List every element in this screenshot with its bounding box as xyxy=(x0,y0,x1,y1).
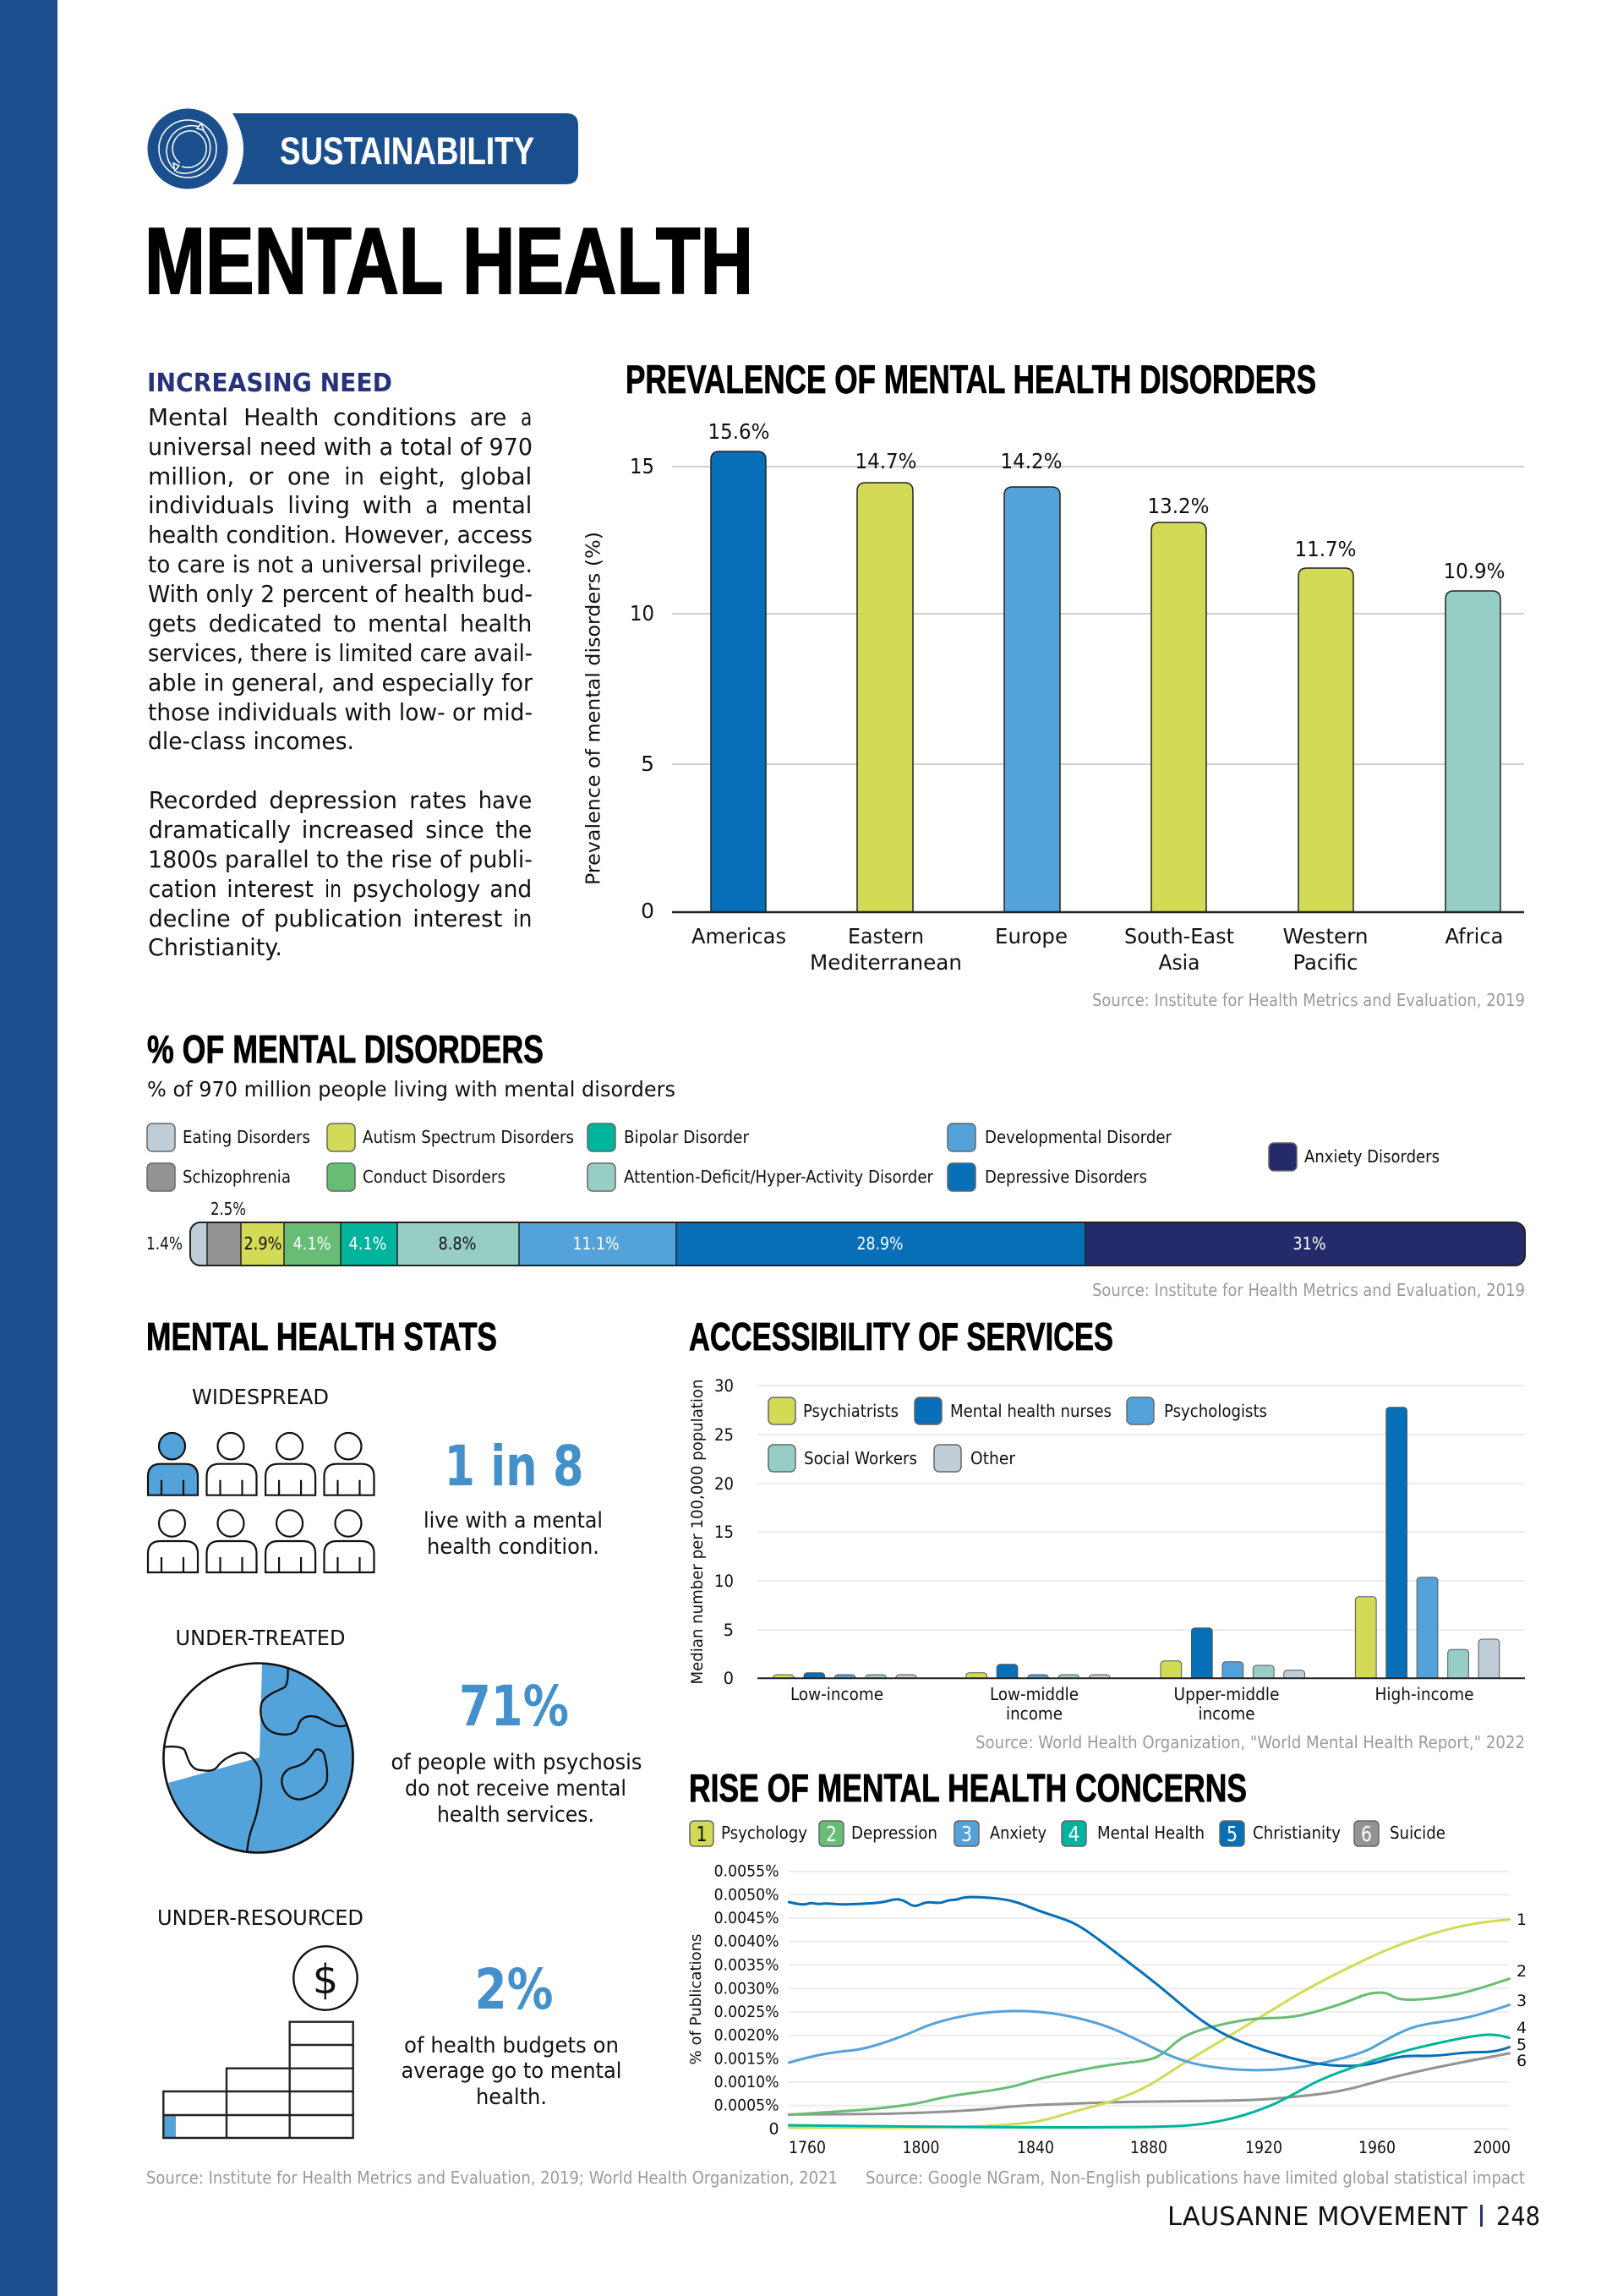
legend: Psychologists xyxy=(1164,1401,1267,1421)
divider bar xyxy=(1480,2205,1483,2227)
bar labels: 2.5% xyxy=(210,1199,246,1219)
paragraph 1: health xyxy=(460,610,532,637)
y axis labels: 5 xyxy=(641,752,654,776)
y axis labels: 0.0050% xyxy=(714,1885,779,1904)
y axis labels: 0.0030% xyxy=(714,1979,779,1998)
paragraph 1: one xyxy=(287,463,331,490)
value labels xyxy=(708,419,1505,583)
paragraph 2: psychology xyxy=(352,876,480,903)
y axis labels xyxy=(714,1862,779,2138)
y axis labels xyxy=(714,1376,734,1688)
paragraph 1: universal need with a total of 970 xyxy=(148,434,533,461)
heading: ACCESSIBILITY OF SERVICES xyxy=(689,1315,1113,1358)
line end labels: 6 xyxy=(1516,2052,1527,2070)
legend: Bipolar Disorder xyxy=(624,1127,750,1147)
paragraph 1: gets xyxy=(148,610,197,637)
line chart: publications over time xyxy=(687,1862,1527,2157)
x axis labels: 1800 xyxy=(903,2138,940,2157)
big number: 2% xyxy=(475,1957,553,2022)
heading: % OF MENTAL DISORDERS xyxy=(147,1027,544,1071)
icon: coin stacks xyxy=(163,1946,358,2138)
panel: prevalence of mental health disorders xyxy=(583,357,1525,1010)
x axis labels: Asia xyxy=(1158,950,1200,975)
y axis labels: 10 xyxy=(630,601,654,626)
label: UNDER-RESOURCED xyxy=(157,1905,363,1930)
paragraph 1: services, there is limited care avail- xyxy=(148,640,533,667)
publisher: LAUSANNE MOVEMENT xyxy=(1167,2202,1468,2232)
source: Source: Institute for Health Metrics and Evaluation, 2019 xyxy=(1092,990,1525,1010)
x axis labels: 1920 xyxy=(1245,2138,1282,2157)
paragraph 1: living xyxy=(287,492,350,519)
legend xyxy=(147,1123,1440,1191)
description: health condition. xyxy=(427,1534,599,1560)
bar labels: 2.9% xyxy=(243,1233,282,1254)
stat: under-resourced xyxy=(157,1905,622,2138)
legend: Psychology xyxy=(721,1823,807,1843)
subheading: INCREASING NEED xyxy=(147,369,392,398)
panel: rise of mental health concerns xyxy=(687,1766,1527,2188)
paragraph 2 xyxy=(148,787,533,961)
x axis labels xyxy=(790,1684,1474,1724)
icon: sustainability circle xyxy=(147,108,228,189)
paragraph 1 xyxy=(148,404,533,755)
x axis labels xyxy=(789,2138,1511,2157)
legend: Suicide xyxy=(1390,1823,1445,1843)
y axis labels: 5 xyxy=(724,1621,734,1640)
x axis labels: Pacific xyxy=(1293,950,1358,975)
legend: Social Workers xyxy=(804,1448,917,1468)
paragraph 1: global xyxy=(460,463,532,490)
legend: Depressive Disorders xyxy=(985,1167,1147,1187)
paragraph 2: in xyxy=(325,876,342,903)
paragraph 1: to care is not a universal privilege. xyxy=(148,551,533,578)
x axis labels: Western xyxy=(1283,924,1368,948)
paragraph 1: able in general, and especially for xyxy=(148,670,533,697)
heading: MENTAL HEALTH STATS xyxy=(146,1315,497,1358)
x axis labels: 2000 xyxy=(1473,2138,1511,2157)
x axis labels: Americas xyxy=(691,924,786,948)
y axis labels: 0.0035% xyxy=(714,1955,779,1974)
x axis labels: income xyxy=(1199,1703,1254,1724)
y axis title: Prevalence of mental disorders (%) xyxy=(583,532,605,885)
paragraph 2: publication xyxy=(274,905,402,932)
legend: 2 xyxy=(826,1822,837,1846)
icon: globe pie xyxy=(164,1664,354,1853)
paragraph 2: since xyxy=(425,817,484,844)
paragraph 1: in xyxy=(344,463,364,490)
big number: 1 in 8 xyxy=(445,1434,583,1499)
x axis labels: Africa xyxy=(1445,924,1503,948)
line end labels: 2 xyxy=(1516,1962,1527,1981)
description: do not receive mental xyxy=(405,1776,626,1801)
x axis labels: Eastern xyxy=(848,924,924,948)
source: Source: Google NGram, Non-English publications have limited global statistical impact xyxy=(866,2168,1525,2188)
y axis labels: 0.0010% xyxy=(714,2073,779,2091)
paragraph 1: to xyxy=(333,610,357,637)
paragraph 1: individuals xyxy=(148,492,274,519)
y axis labels xyxy=(630,454,654,923)
page number: 248 xyxy=(1496,2202,1540,2232)
paragraph 2: depression xyxy=(269,787,397,814)
x axis labels: Low-income xyxy=(790,1684,883,1704)
y axis title: Median number per 100,000 population xyxy=(688,1380,707,1684)
description xyxy=(391,1750,642,1828)
lines xyxy=(789,1897,1510,2128)
legend: Depression xyxy=(851,1823,937,1843)
subtitle: % of 970 million people living with mental disorders xyxy=(147,1077,675,1102)
line end labels xyxy=(1516,1911,1527,2070)
bars xyxy=(773,1408,1500,1696)
badge: sustainability xyxy=(147,108,578,189)
x axis labels: High-income xyxy=(1374,1684,1474,1704)
badge bar xyxy=(232,113,578,184)
legend: 6 xyxy=(1361,1822,1372,1846)
paragraph 1: with xyxy=(363,492,413,519)
y axis labels: 30 xyxy=(714,1376,734,1396)
x axis labels: 1960 xyxy=(1358,2138,1396,2157)
paragraph 1: health condition. However, access xyxy=(148,522,533,549)
description: of people with psychosis xyxy=(391,1750,642,1775)
legend: Attention-Deficit/Hyper-Activity Disorder xyxy=(624,1167,934,1187)
bars xyxy=(711,451,1500,912)
legend: Eating Disorders xyxy=(183,1127,310,1147)
legend: Schizophrenia xyxy=(183,1167,291,1187)
paragraph 2: Recorded xyxy=(149,787,258,814)
panel: percent of mental disorders xyxy=(146,1027,1525,1300)
bar labels: 4.1% xyxy=(292,1233,331,1254)
x axis labels: Mediterranean xyxy=(810,950,962,975)
bar chart: workforce by income xyxy=(688,1376,1525,1724)
text block: increasing need xyxy=(147,369,533,961)
value labels: 13.2% xyxy=(1148,494,1209,518)
legend: Anxiety xyxy=(990,1823,1046,1843)
legend: Mental Health xyxy=(1097,1823,1205,1843)
paragraph 1: mental xyxy=(368,610,448,637)
x axis labels: South-East xyxy=(1124,924,1234,948)
stat: under-treated xyxy=(164,1626,642,1853)
bar labels: 11.1% xyxy=(573,1233,619,1254)
stacked bar xyxy=(146,1199,1525,1266)
paragraph 1: a xyxy=(425,492,438,519)
footer xyxy=(1167,2202,1540,2232)
paragraph 1: dle-class incomes. xyxy=(148,728,354,755)
paragraph 1: those individuals with low- or mid- xyxy=(148,699,533,726)
paragraph 1: or xyxy=(249,463,274,490)
paragraph 2: the xyxy=(495,817,532,844)
bar labels: 1.4% xyxy=(146,1233,183,1254)
paragraph 2: of xyxy=(241,905,265,932)
title: MENTAL HEALTH xyxy=(145,209,753,314)
y axis labels: 15 xyxy=(714,1522,734,1542)
legend xyxy=(690,1821,1445,1846)
y axis title: % of Publications xyxy=(687,1934,705,2064)
paragraph 1: mental xyxy=(451,492,532,519)
y axis labels: 25 xyxy=(714,1425,734,1445)
source: Source: World Health Organization, "World Mental Health Report," 2022 xyxy=(975,1732,1525,1752)
paragraph 1: conditions xyxy=(333,404,456,431)
x axis labels: income xyxy=(1006,1703,1063,1724)
y axis labels: 15 xyxy=(630,454,654,478)
y axis labels: 0 xyxy=(769,2119,779,2138)
description xyxy=(401,2033,622,2110)
heading: RISE OF MENTAL HEALTH CONCERNS xyxy=(689,1766,1247,1810)
description: live with a mental xyxy=(424,1508,603,1533)
value labels: 14.7% xyxy=(855,449,916,473)
x axis labels: 1880 xyxy=(1130,2138,1167,2157)
description: health. xyxy=(476,2085,547,2110)
paragraph 2: interest xyxy=(227,876,314,903)
y axis labels: 10 xyxy=(714,1572,734,1591)
panel: mental health stats xyxy=(146,1315,642,2138)
legend: Psychiatrists xyxy=(803,1401,899,1421)
label: WIDESPREAD xyxy=(192,1385,329,1409)
paragraph 2: dramatically xyxy=(149,817,291,844)
line end labels: 3 xyxy=(1516,1992,1527,2010)
legend: 1 xyxy=(697,1822,707,1846)
sidebar xyxy=(0,0,57,2296)
line end labels: 4 xyxy=(1516,2019,1527,2037)
paragraph 2: rates xyxy=(409,787,467,814)
y axis labels: 0.0055% xyxy=(714,1862,779,1881)
bar labels: 28.9% xyxy=(857,1233,903,1254)
y axis labels: 20 xyxy=(714,1474,734,1494)
legend: Autism Spectrum Disorders xyxy=(363,1127,574,1147)
panel: accessibility of services xyxy=(688,1315,1525,1752)
value labels: 11.7% xyxy=(1295,537,1356,561)
y axis labels: 0.0045% xyxy=(714,1909,779,1927)
paragraph 2: decline xyxy=(149,905,231,932)
legend xyxy=(768,1397,1267,1472)
paragraph 2: increased xyxy=(302,817,414,844)
y axis labels: 0.0025% xyxy=(714,2003,779,2021)
value labels: 14.2% xyxy=(1001,449,1062,473)
paragraph 2: 1800s parallel to the rise of publi- xyxy=(148,846,533,873)
paragraph 2: and xyxy=(489,876,532,903)
legend: Anxiety Disorders xyxy=(1304,1146,1440,1167)
paragraph 1: dedicated xyxy=(209,610,322,637)
label: UNDER-TREATED xyxy=(176,1626,345,1650)
legend: Developmental Disorder xyxy=(985,1127,1172,1147)
legend: Christianity xyxy=(1253,1823,1341,1843)
paragraph 1: With only 2 percent of health bud- xyxy=(148,581,533,608)
paragraph 1: are xyxy=(470,404,506,431)
heading: PREVALENCE OF MENTAL HEALTH DISORDERS xyxy=(626,357,1316,402)
x axis labels: Upper-middle xyxy=(1173,1684,1280,1704)
paragraph 1: eight, xyxy=(379,463,445,490)
bar labels: 8.8% xyxy=(438,1233,477,1254)
x axis labels: 1760 xyxy=(789,2138,826,2157)
paragraph 2: cation xyxy=(149,876,217,903)
paragraph 2: in xyxy=(513,905,532,932)
paragraph 2: Christianity. xyxy=(148,934,282,961)
value labels: 15.6% xyxy=(708,419,769,444)
legend: Conduct Disorders xyxy=(363,1167,505,1187)
y axis labels: 0.0040% xyxy=(714,1932,779,1951)
description: health services. xyxy=(437,1802,594,1828)
bar labels: 4.1% xyxy=(348,1233,387,1254)
source: Source: Institute for Health Metrics and Evaluation, 2019 xyxy=(1092,1280,1525,1300)
x axis labels: Low-middle xyxy=(990,1684,1079,1704)
bar labels: 31% xyxy=(1293,1233,1325,1254)
y axis labels: 0.0005% xyxy=(714,2096,779,2115)
x axis labels xyxy=(691,924,1503,975)
paragraph 1: a xyxy=(521,404,532,431)
paragraph 1: million, xyxy=(148,463,234,490)
icon: eight people xyxy=(148,1433,374,1572)
legend: 5 xyxy=(1227,1822,1238,1846)
icon: coin stacks: $ xyxy=(313,1956,338,2004)
legend: Other xyxy=(970,1448,1016,1468)
badge label: SUSTAINABILITY xyxy=(280,129,534,172)
paragraph 1: Mental xyxy=(148,404,228,431)
x axis labels: 1840 xyxy=(1017,2138,1054,2157)
paragraph 2: interest xyxy=(413,905,503,932)
legend: Mental health nurses xyxy=(950,1401,1112,1421)
paragraph 1: Health xyxy=(243,404,319,431)
y axis labels: 0.0015% xyxy=(714,2049,779,2068)
y axis labels: 0.0020% xyxy=(714,2026,779,2045)
bar labels xyxy=(146,1199,1325,1254)
legend: 3 xyxy=(961,1822,972,1846)
y axis labels: 0 xyxy=(724,1669,734,1688)
value labels: 10.9% xyxy=(1444,559,1505,583)
line end labels: 5 xyxy=(1516,2036,1527,2054)
description: of health budgets on xyxy=(404,2033,619,2058)
big number: 71% xyxy=(459,1674,569,1739)
stat: widespread xyxy=(148,1385,603,1572)
legend: 4 xyxy=(1068,1822,1080,1846)
bar chart: prevalence by region xyxy=(583,419,1524,975)
source: stats: Source: Institute for Health Metrics and Evaluation, 2019; World Health Organization, 2021 xyxy=(146,2168,838,2188)
y axis labels: 0 xyxy=(641,899,654,923)
description: average go to mental xyxy=(401,2058,622,2084)
line end labels: 1 xyxy=(1516,1911,1527,1929)
description xyxy=(424,1508,603,1560)
paragraph 2: have xyxy=(478,787,532,814)
x axis labels: Europe xyxy=(995,924,1068,948)
